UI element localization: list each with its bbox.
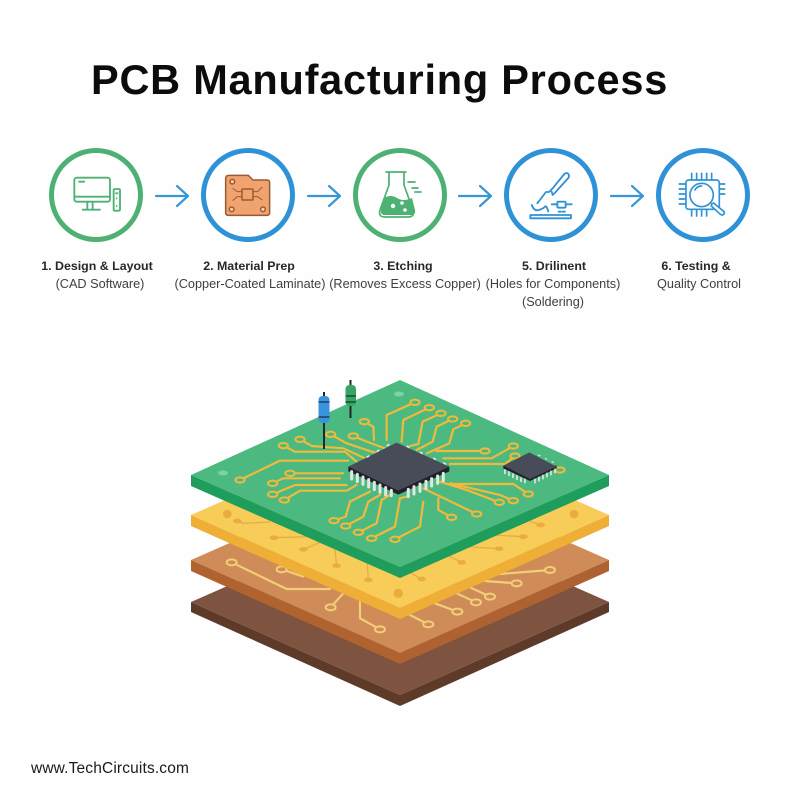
large microchip xyxy=(348,443,449,497)
step 3: etching xyxy=(329,150,481,291)
PCB layer: copper with traces xyxy=(191,468,609,664)
icon: soldering iron xyxy=(530,173,572,218)
icon: computer monitor and tower xyxy=(74,178,120,211)
arrow 5 to 6 xyxy=(611,186,643,206)
step 6: testing and quality control xyxy=(657,150,748,291)
green resistor xyxy=(346,380,356,418)
step 1: design and layout xyxy=(41,150,153,291)
step 5: drilling and soldering: (Holes for Components) xyxy=(486,277,620,291)
step 3: etching: 3. Etching xyxy=(373,259,433,273)
step 1: design and layout: 1. Design & Layout xyxy=(41,259,153,273)
PCB layer: yellow with traces xyxy=(191,423,609,619)
arrow 2 to 3 xyxy=(308,186,340,206)
icon: copper laminate board xyxy=(226,175,270,215)
yellow layer traces xyxy=(223,510,578,598)
PCB layer: green circuit board xyxy=(191,380,609,578)
title: PCB Manufacturing Process xyxy=(91,56,668,103)
step 5: drilling and soldering: (Soldering) xyxy=(522,295,584,309)
copper layer traces xyxy=(227,559,555,632)
footer website: www.TechCircuits.com xyxy=(30,760,189,777)
green board traces xyxy=(235,400,565,542)
step 2: material prep: (Copper-Coated Laminate) xyxy=(175,277,325,291)
arrow 3 to 5 xyxy=(459,186,491,206)
arrow 1 to 2 xyxy=(156,186,188,206)
blue resistor xyxy=(318,392,330,449)
PCB layer: brown substrate xyxy=(191,510,609,706)
step 6: testing and quality control: 6. Testing & xyxy=(661,259,731,273)
step 2: material prep xyxy=(175,150,325,291)
icon: chip under magnifier xyxy=(679,173,725,216)
step 2: material prep: 2. Material Prep xyxy=(203,259,295,273)
step 3: etching: (Removes Excess Copper) xyxy=(329,277,481,291)
small microchip xyxy=(503,452,557,483)
step 1: design and layout: (CAD Software) xyxy=(56,277,144,291)
step 5: drilling and soldering xyxy=(486,150,620,309)
step 6: testing and quality control: Quality Control xyxy=(657,277,741,291)
icon: chemistry flask xyxy=(380,172,421,217)
step 5: drilling and soldering: 5. Drilinent xyxy=(522,259,586,273)
